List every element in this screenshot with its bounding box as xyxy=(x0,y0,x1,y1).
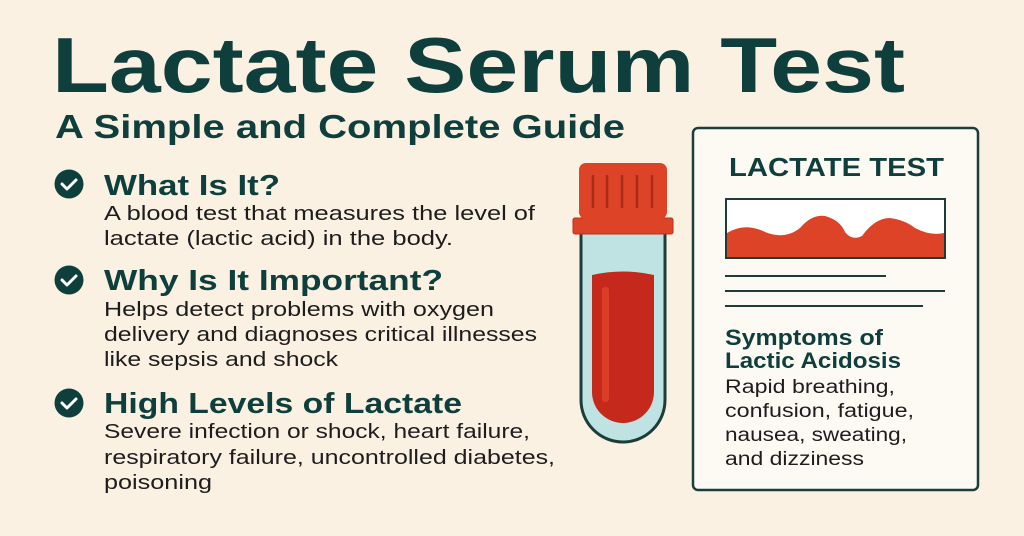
heading: symptoms: Lactic Acidosis xyxy=(725,348,901,373)
text: high levels xyxy=(104,421,555,494)
text: high levels: Severe infection or shock, heart failure, xyxy=(104,421,530,443)
panel heading: LACTATE TEST xyxy=(729,152,944,182)
icon: check xyxy=(54,388,84,418)
section: what is it xyxy=(54,170,536,250)
text: what is it xyxy=(104,203,536,250)
section: why important xyxy=(54,265,537,371)
title: Lactate Serum Test xyxy=(52,21,905,109)
text: symptoms list: confusion, fatigue, xyxy=(725,401,914,422)
heading: why important: Why Is It Important? xyxy=(104,265,443,297)
text: high levels: poisoning xyxy=(104,472,212,494)
panel: lactate test report xyxy=(693,128,978,490)
text placeholder lines xyxy=(725,276,945,306)
text: high levels: respiratory failure, uncontrolled diabetes, xyxy=(104,447,555,469)
text: why important xyxy=(104,299,537,371)
text: symptoms list xyxy=(725,377,914,470)
section: high levels xyxy=(54,388,555,494)
text: why important: delivery and diagnoses critical illnesses xyxy=(104,324,537,346)
text: what is it: lactate (lactic acid) in the body. xyxy=(104,228,453,250)
text: symptoms list: Rapid breathing, xyxy=(725,377,895,398)
icon: check xyxy=(54,170,84,198)
heading: high levels: High Levels of Lactate xyxy=(104,388,462,420)
subtitle: A Simple and Complete Guide xyxy=(55,108,625,145)
icon: test tube xyxy=(573,163,673,442)
heading: symptoms: Symptoms of xyxy=(725,325,884,350)
heading: symptoms xyxy=(725,325,901,373)
heading: what is it: What Is It? xyxy=(104,170,280,202)
text: symptoms list: nausea, sweating, xyxy=(725,425,907,446)
text: why important: Helps detect problems with oxygen xyxy=(104,299,494,321)
icon: check xyxy=(54,266,84,294)
text: what is it: A blood test that measures the level of xyxy=(104,203,536,225)
text: why important: like sepsis and shock xyxy=(104,349,339,371)
text: symptoms list: and dizziness xyxy=(725,449,864,470)
chart: waveform xyxy=(726,199,945,258)
